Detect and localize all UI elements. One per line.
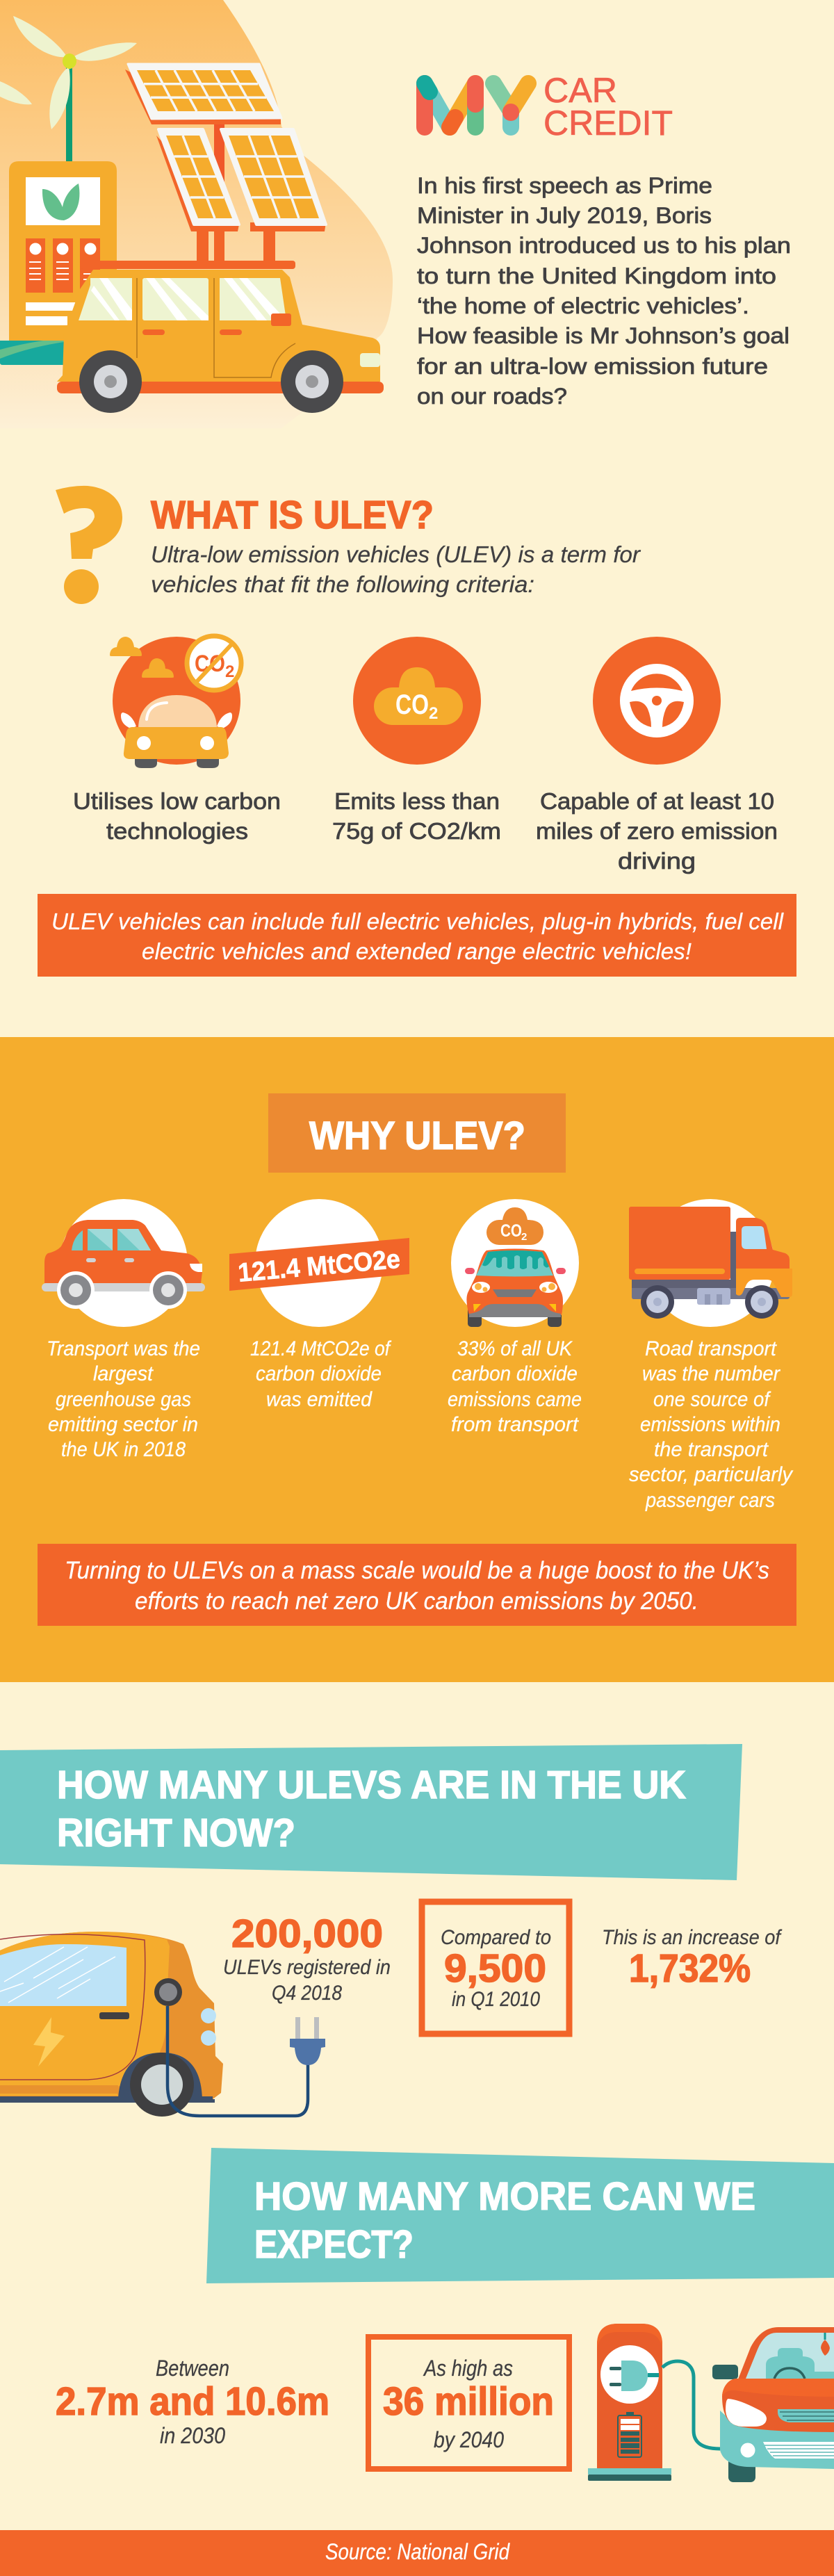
stat text: transport — [47, 1337, 200, 1461]
stat: 200,000: Q4 2018 — [272, 1982, 342, 2005]
stat box: 2040: 36 million — [383, 2379, 554, 2424]
heading banner — [0, 1744, 742, 1880]
intro text: to turn the United Kingdom into — [417, 263, 776, 288]
panel: how many ULEVs — [0, 1744, 782, 2117]
panel: how many more — [56, 2148, 834, 2482]
intro text: vehicles that fit the following criteria: — [151, 571, 534, 597]
icon: lorry — [629, 1199, 792, 1327]
heading banner: HOW MANY ULEVS ARE IN THE UK — [57, 1763, 686, 1807]
criteria labels: miles of zero emission — [536, 818, 778, 844]
icon: low carbon car: CO — [195, 651, 225, 677]
stat box: 9,500: Compared to — [441, 1926, 551, 1949]
stat text: transport: largest — [93, 1362, 154, 1385]
criteria labels — [73, 788, 778, 874]
stat text: road transport: emissions within — [640, 1413, 780, 1436]
stat: 2030: 2.7m and 10.6m — [56, 2379, 329, 2424]
stat: 1,732% — [602, 1926, 782, 1991]
stat: 200,000 — [223, 1911, 391, 2005]
stat text: transport: emitting sector in — [48, 1413, 198, 1436]
icon: car with CO2 cloud — [451, 1199, 579, 1327]
stat box: 2040: by 2040 — [434, 2427, 504, 2452]
intro text: ‘the home of electric vehicles’. — [417, 293, 749, 318]
stat: 2030: Between — [156, 2356, 229, 2381]
stat text: transport: greenhouse gas — [56, 1388, 191, 1411]
stat box: 2040: As high as — [423, 2356, 513, 2381]
intro text — [417, 173, 791, 409]
callout — [38, 894, 796, 977]
icon: CO2 cloud: CO — [395, 690, 429, 720]
heading — [268, 1093, 566, 1173]
criteria labels: 75g of CO2/km — [332, 818, 501, 844]
criteria labels: Emits less than — [334, 788, 500, 814]
footer — [0, 2530, 834, 2576]
logo wordmark: CREDIT — [543, 104, 673, 142]
stat text: road transport: sector, particularly — [629, 1463, 794, 1486]
stat text: road transport: Road transport — [645, 1337, 778, 1360]
icon: wind turbine — [0, 16, 137, 161]
stat text: road transport: the transport — [654, 1438, 769, 1461]
intro text: How feasible is Mr Johnson’s goal — [417, 323, 790, 348]
stat text: 33 percent — [448, 1337, 582, 1436]
icon: question mark — [56, 486, 122, 604]
stat: 2030 — [56, 2356, 329, 2448]
footer: Source: National Grid — [325, 2539, 510, 2564]
icon: charging station — [0, 161, 117, 365]
stat text: 33 percent: 33% of all UK — [457, 1337, 573, 1360]
icon: steering wheel — [593, 637, 721, 765]
stat text: transport: the UK in 2018 — [61, 1438, 186, 1461]
stat: 200,000: 200,000 — [231, 1911, 383, 1956]
charging point — [588, 2324, 671, 2481]
icon: CO2 cloud — [353, 637, 481, 765]
cable — [662, 2361, 720, 2449]
stat text: carbon dioxide emitted: 121.4 MtCO2e of — [250, 1337, 391, 1360]
icon: car with CO2 cloud: CO — [500, 1221, 522, 1241]
icon: charging point and car — [588, 2324, 834, 2482]
icon: orange car — [42, 1199, 205, 1327]
icon: emissions banner: 121.4 MtCO2e — [237, 1245, 401, 1288]
stat text: 33 percent: emissions came — [448, 1388, 582, 1411]
stat text: road transport: passenger cars — [645, 1489, 775, 1512]
icon: low carbon car: 2 — [225, 662, 234, 681]
teal car — [712, 2327, 834, 2482]
stat: 1,732%: This is an increase of — [602, 1926, 782, 1949]
stat box: 9,500: 9,500 — [444, 1946, 546, 1991]
icon: electric car with plug — [0, 1932, 325, 2117]
logo: My Car Credit — [425, 71, 673, 142]
icon: emissions banner — [229, 1199, 409, 1327]
logo mark — [425, 83, 528, 127]
icon: low carbon car — [110, 636, 241, 768]
icon: yellow car — [57, 261, 384, 413]
intro text — [151, 541, 641, 597]
stat: 2030: in 2030 — [160, 2423, 225, 2448]
icon: CO2 cloud: 2 — [429, 704, 438, 723]
intro text: Ultra-low emission vehicles (ULEV) is a term for — [151, 541, 641, 567]
intro text: for an ultra-low emission future — [417, 354, 768, 379]
stat text: transport: Transport was the — [47, 1337, 200, 1360]
logo wordmark — [543, 71, 673, 142]
stat: 200,000: ULEVs registered in — [223, 1956, 391, 1979]
panel: what is ULEV — [38, 486, 796, 977]
logo wordmark: CAR — [543, 71, 617, 110]
stat box: 9,500 — [422, 1902, 569, 2034]
intro text: Johnson introduced us to his plan — [417, 233, 791, 258]
stat box: 9,500: in Q1 2010 — [452, 1988, 540, 2011]
heading banner: EXPECT? — [254, 2222, 414, 2267]
intro text: Minister in July 2019, Boris — [417, 203, 712, 228]
stat text: road transport — [629, 1337, 794, 1512]
heading banner: RIGHT NOW? — [57, 1811, 295, 1855]
criteria labels: driving — [618, 848, 696, 874]
stat text: road transport: one source of — [653, 1388, 771, 1411]
heading banner — [206, 2148, 834, 2283]
stat: 1,732%: 1,732% — [629, 1946, 751, 1991]
callout: Turning to ULEVs on a mass scale would be a huge boost to the UK’s — [65, 1557, 769, 1584]
criteria labels: Capable of at least 10 — [540, 788, 774, 814]
icon: car with CO2 cloud: 2 — [521, 1231, 527, 1243]
stat text: carbon dioxide emitted: carbon dioxide — [256, 1362, 382, 1385]
stat text: 33 percent: from transport — [451, 1413, 580, 1436]
criteria labels: technologies — [106, 818, 248, 844]
callout: electric vehicles and extended range electric vehicles! — [142, 938, 692, 964]
intro text: on our roads? — [417, 384, 567, 409]
panel: why ULEV — [0, 1037, 834, 1682]
background blob — [0, 0, 393, 428]
callout: efforts to reach net zero UK carbon emissions by 2050. — [135, 1588, 698, 1615]
stat text: road transport: was the number — [642, 1362, 780, 1385]
callout — [38, 1544, 796, 1626]
heading: WHY ULEV? — [309, 1114, 525, 1158]
hero illustration: car with solar panels — [0, 0, 393, 428]
callout: ULEV vehicles can include full electric vehicles, plug-in hybrids, fuel cell — [51, 908, 785, 934]
stat text: 33 percent: carbon dioxide — [452, 1362, 578, 1385]
stat box: 2040 — [368, 2337, 569, 2469]
stat text: carbon dioxide emitted — [250, 1337, 391, 1411]
icon: solar panels — [125, 64, 326, 261]
heading: WHAT IS ULEV? — [151, 493, 434, 537]
intro text: In his first speech as Prime — [417, 173, 712, 198]
criteria labels: Utilises low carbon — [73, 788, 281, 814]
heading banner: HOW MANY MORE CAN WE — [254, 2174, 755, 2219]
stat text: carbon dioxide emitted: was emitted — [266, 1388, 373, 1411]
